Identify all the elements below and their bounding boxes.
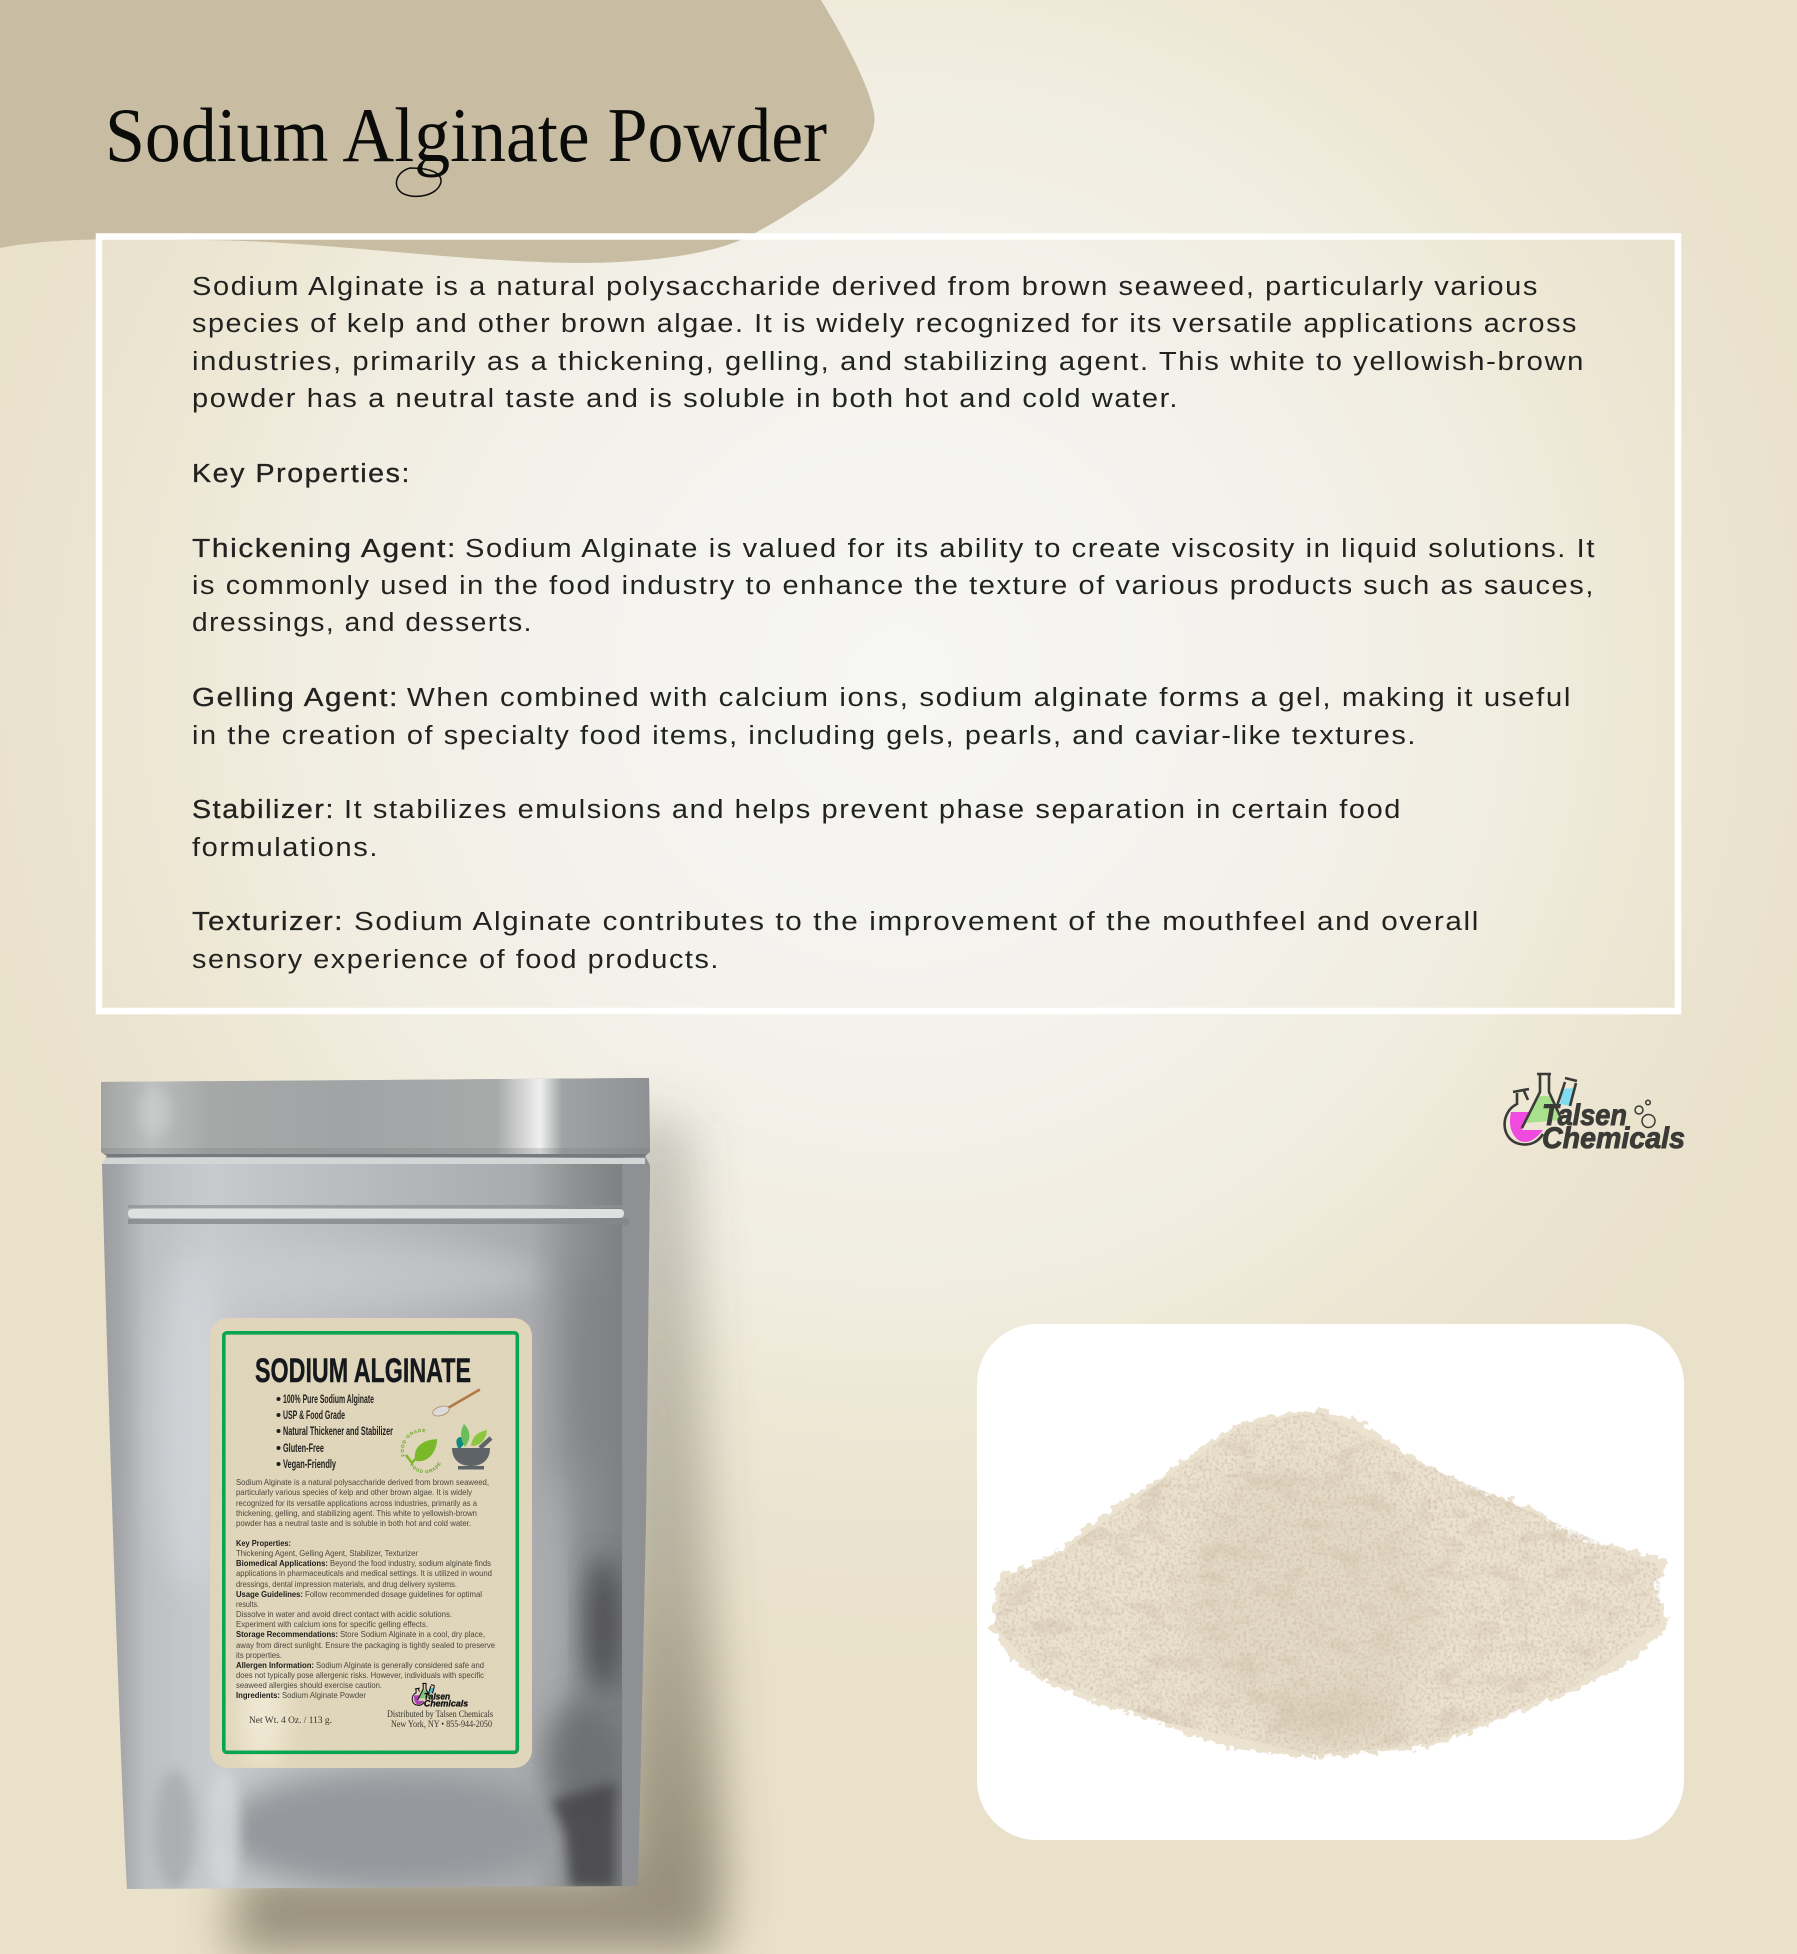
product pouch <box>100 1075 655 1892</box>
description text <box>192 273 1596 974</box>
small talsen logo <box>412 1683 468 1708</box>
icon: food grade badge: FOOD GRADE <box>400 1428 426 1457</box>
logo wordmark <box>1542 1099 1685 1155</box>
label description: Thickening Agent, Gelling Agent, Stabilizer, Texturizer <box>236 1548 418 1558</box>
logo wordmark: Talsen <box>1542 1099 1627 1132</box>
label bullets: Gluten-Free <box>283 1443 324 1455</box>
distributor: New York, NY • 855-944-2050 <box>391 1719 492 1730</box>
intro paragraph <box>192 273 1585 413</box>
icon: spoon <box>432 1390 479 1418</box>
stabilizer <box>192 796 1402 862</box>
label border <box>224 1333 517 1752</box>
intro paragraph: industries, primarily as a thickening, gelling, and stabilizing agent. This white to yellowish-brown <box>192 348 1585 376</box>
logo flasks <box>1505 1074 1577 1145</box>
label bullets: USP & Food Grade <box>283 1410 345 1422</box>
distributor: Distributed by Talsen Chemicals <box>387 1709 493 1720</box>
powder pile <box>991 1408 1668 1758</box>
label bullets: Natural Thickener and Stabilizer <box>283 1426 393 1438</box>
label description: Allergen Information: <box>236 1660 314 1670</box>
label description: its properties. <box>236 1650 282 1660</box>
product label <box>210 1318 532 1768</box>
label description: results. <box>236 1599 259 1609</box>
label description: seaweed allergies should exercise caution. <box>236 1680 382 1690</box>
texturizer: sensory experience of food products. <box>192 946 720 974</box>
intro paragraph: Sodium Alginate is a natural polysaccharide derived from brown seaweed, particularly various <box>192 273 1539 301</box>
intro paragraph: species of kelp and other brown algae. It is widely recognized for its versatile applications across <box>192 310 1578 338</box>
label description: Beyond the food industry, sodium alginate finds <box>330 1558 491 1568</box>
thickening agent: is commonly used in the food industry to enhance the texture of various products such as sauces, <box>192 572 1595 600</box>
small talsen logo: Chemicals <box>424 1698 468 1708</box>
label description: Usage Guidelines: <box>236 1589 303 1599</box>
label description: recognized for its versatile applications across industries, primarily as a <box>236 1498 477 1508</box>
logo bubbles <box>1635 1100 1655 1128</box>
label description: Storage Recommendations: <box>236 1629 338 1639</box>
label description: Experiment with calcium ions for specific gelling effects. <box>236 1619 428 1629</box>
label description: Biomedical Applications: <box>236 1558 328 1568</box>
label description: Dissolve in water and avoid direct contact with acidic solutions. <box>236 1609 452 1619</box>
label description: Store Sodium Alginate in a cool, dry place, <box>340 1629 485 1639</box>
distributor <box>387 1709 493 1730</box>
label bullets: Vegan-Friendly <box>283 1459 336 1471</box>
label description: thickening, gelling, and stabilizing agent. This white to yellowish-brown <box>236 1508 477 1518</box>
icon: mortar and pestle <box>452 1424 491 1470</box>
zip line <box>128 1205 629 1226</box>
label description: powder has a neutral taste and is soluble in both hot and cold water. <box>236 1518 471 1528</box>
label title: SODIUM ALGINATE <box>255 1352 471 1390</box>
gelling agent: When combined with calcium ions, sodium alginate forms a gel, making it useful <box>407 684 1572 712</box>
bag shadow <box>228 1110 725 1954</box>
stabilizer: Stabilizer: <box>192 796 335 824</box>
talsen chemicals logo <box>1505 1074 1685 1155</box>
label description: does not typically pose allergenic risks. However, individuals with specific <box>236 1670 485 1680</box>
label description: Follow recommended dosage guidelines for optimal <box>305 1589 482 1599</box>
intro paragraph: powder has a neutral taste and is soluble in both hot and cold water. <box>192 385 1179 413</box>
label bullets <box>276 1394 393 1471</box>
label bullets: 100% Pure Sodium Alginate <box>283 1394 374 1406</box>
card background <box>977 1324 1684 1840</box>
stabilizer: It stabilizes emulsions and helps prevent phase separation in certain food <box>344 796 1402 824</box>
logo wordmark: Chemicals <box>1542 1122 1685 1155</box>
thickening agent: Sodium Alginate is valued for its ability to create viscosity in liquid solutions. It <box>465 535 1596 563</box>
texturizer: Texturizer: <box>192 908 344 936</box>
label description: Sodium Alginate Powder <box>282 1690 366 1700</box>
texturizer <box>192 908 1480 974</box>
pouch body <box>100 1075 655 1890</box>
label description: Ingredients: <box>236 1690 280 1700</box>
gelling agent: in the creation of specialty food items, including gels, pearls, and caviar-like textures. <box>192 722 1417 750</box>
thickening agent <box>192 535 1596 637</box>
pouch highlights and folds <box>155 1165 652 1892</box>
icon: food grade badge: FOOD GRADE <box>410 1462 441 1474</box>
label paper <box>210 1318 532 1768</box>
header blob <box>0 0 874 263</box>
label description <box>236 1477 495 1700</box>
small talsen logo: Talsen <box>424 1691 450 1701</box>
label description: applications in pharmaceuticals and medical settings. It is utilized in wound <box>236 1568 492 1578</box>
thickening agent: Thickening Agent: <box>192 535 457 563</box>
stabilizer: formulations. <box>192 834 379 862</box>
thickening agent: dressings, and desserts. <box>192 609 533 637</box>
label description: Sodium Alginate is generally considered safe and <box>316 1660 484 1670</box>
gelling agent: Gelling Agent: <box>192 684 399 712</box>
title: Sodium Alginate Powder <box>105 92 827 178</box>
label description: Key Properties: <box>236 1538 291 1548</box>
icon: food grade badge <box>400 1428 441 1474</box>
gelling agent <box>192 684 1572 750</box>
key properties heading: Key Properties: <box>192 460 411 488</box>
texturizer: Sodium Alginate contributes to the improvement of the mouthfeel and overall <box>354 908 1480 936</box>
powder card <box>977 1324 1684 1840</box>
label description: away from direct sunlight. Ensure the packaging is tightly sealed to preserve <box>236 1640 495 1650</box>
label description: particularly various species of kelp and other brown algae. It is widely <box>236 1487 473 1497</box>
top seal strip <box>100 1076 652 1164</box>
label description: dressings, dental impression materials, and drug delivery systems. <box>236 1579 457 1589</box>
description frame <box>99 236 1678 1011</box>
net weight: Net Wt. 4 Oz. / 113 g. <box>249 1715 332 1726</box>
label description: Sodium Alginate is a natural polysaccharide derived from brown seaweed, <box>236 1477 489 1487</box>
